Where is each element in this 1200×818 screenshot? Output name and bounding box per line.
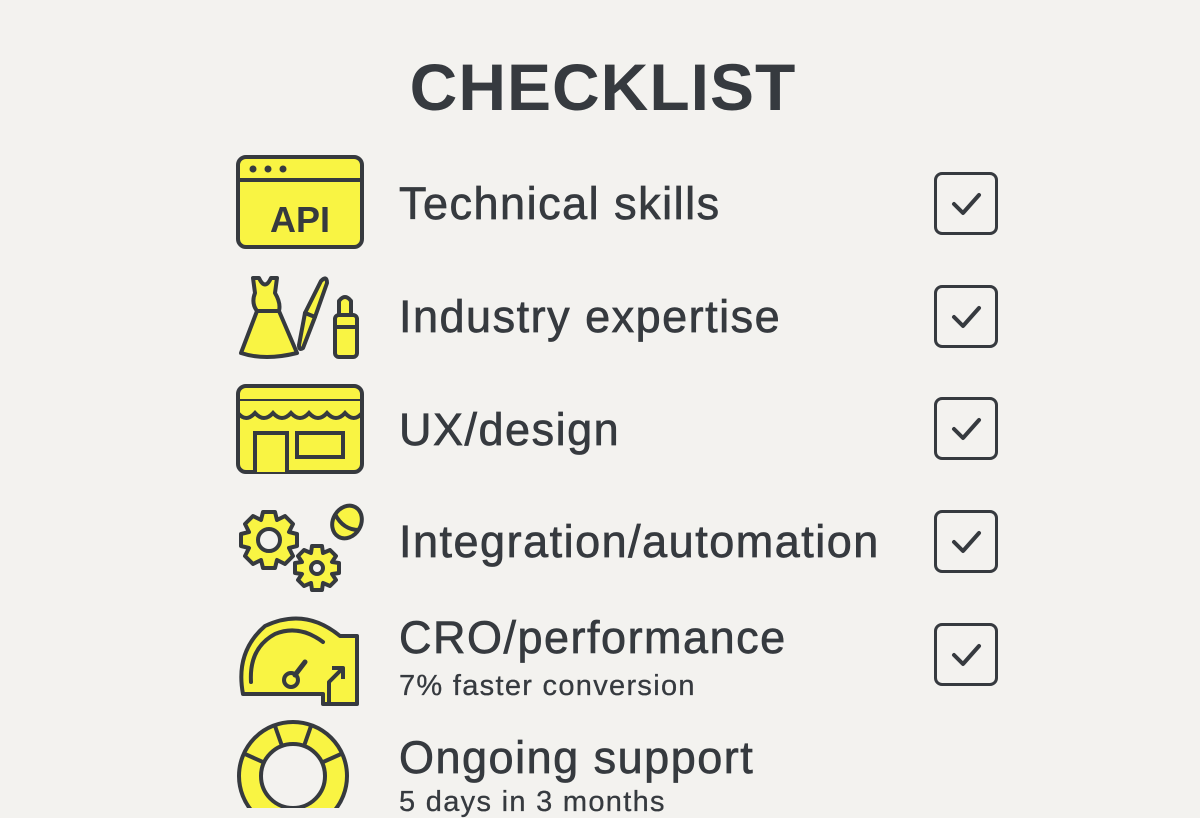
subtext: ongoing: 5 days in 3 months — [399, 786, 666, 818]
title: CHECKLIST — [410, 50, 796, 124]
checkbox 3 — [934, 397, 998, 460]
icon: API window: API — [270, 199, 330, 240]
icon: API window — [236, 155, 364, 249]
label: CRO/performance: CRO/performance — [399, 612, 787, 663]
icon: gauge — [239, 616, 359, 706]
subtext: 7% faster conversion: 7% faster conversion — [399, 670, 696, 702]
icon: dress brush lipstick — [238, 276, 359, 359]
icon: storefront — [236, 384, 364, 474]
label: Integration/automation: Integration/automation — [399, 516, 880, 567]
label: Ongoing support: Ongoing support — [399, 732, 754, 783]
checkbox 5 — [934, 623, 998, 686]
label: Technical skills: Technical skills — [399, 178, 721, 229]
label: Industry expertise: Industry expertise — [399, 291, 781, 342]
checkbox 2 — [934, 285, 998, 348]
label: UX/design: UX/design — [399, 404, 620, 455]
icon: lifebuoy — [237, 720, 349, 808]
checkbox 1 — [934, 172, 998, 235]
checkbox 4 — [934, 510, 998, 573]
icon: gears — [239, 504, 364, 592]
